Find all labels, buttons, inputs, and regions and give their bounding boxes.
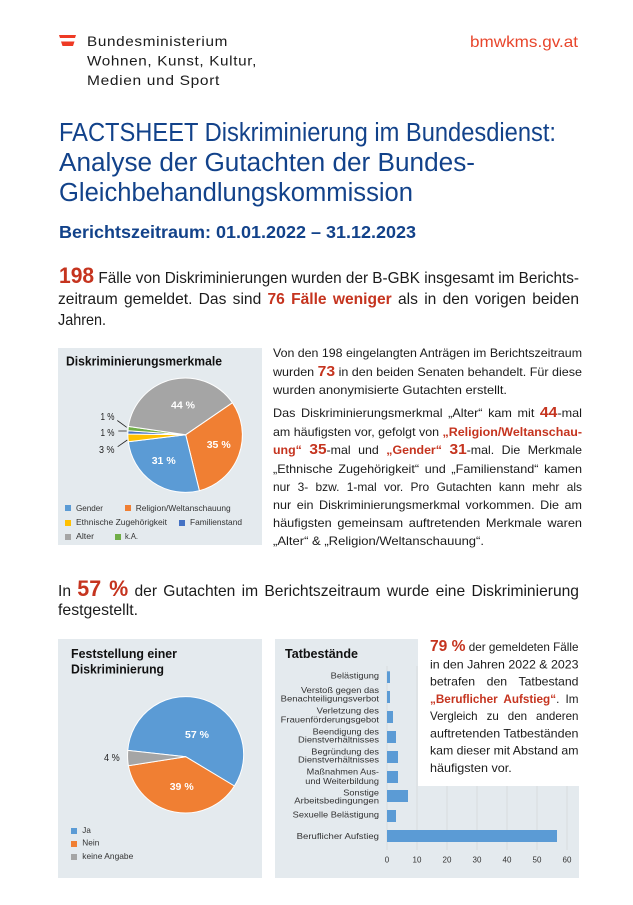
pie value labels: 4 % xyxy=(104,752,120,764)
ministry name xyxy=(87,33,257,88)
body text: senate cases and characteristics: wurden 73 in den beiden Senaten behandelt. Für diese xyxy=(272,363,582,380)
ministry name: Bundesministerium xyxy=(87,33,228,49)
panel heading: Feststellung einer xyxy=(71,647,177,661)
body text: senate cases and characteristics: ung“ 35-mal und „Gender“ 31-mal. Die Merkmale xyxy=(273,441,582,458)
x axis labels xyxy=(385,856,572,864)
bar labels: Frauenförderungsgebot xyxy=(281,715,380,725)
bar chart: Tatbestände xyxy=(387,671,557,842)
callout: 79 %: häufigsten vor. xyxy=(430,761,512,775)
bar labels: Sexuelle Belästigung xyxy=(293,810,379,820)
callout: 79 %: Vergleich zu den anderen xyxy=(430,709,578,723)
bar labels: und Weiterbildung xyxy=(305,776,379,786)
panel heading: Diskriminierungsmerkmale xyxy=(66,354,222,368)
legend: Ethnische Zugehörigkeit xyxy=(76,517,168,527)
callout: 79 %: „Beruflicher Aufstieg“. Im xyxy=(430,692,579,706)
intro text xyxy=(58,263,579,329)
x axis labels: 10 xyxy=(413,856,422,864)
pie value labels: 1 % xyxy=(100,411,114,423)
x axis labels: 50 xyxy=(533,856,542,864)
callout: 79 %: betrafen den Tatbestand xyxy=(430,674,578,688)
x axis labels: 30 xyxy=(473,856,482,864)
body text: senate cases and characteristics: „Alter“ & „Religion/Weltanschauung“. xyxy=(273,534,484,548)
finding statement: In 57 % der Gutachten im Berichtszeitraum wurde eine Diskriminierung xyxy=(58,576,579,601)
panel: Tatbestände xyxy=(275,639,580,878)
ministry name: Medien und Sport xyxy=(87,72,220,88)
panel: Diskriminierungsmerkmale xyxy=(58,348,262,545)
body text: senate cases and characteristics: Von den 198 eingelangten Anträgen im Berichtszeitraum xyxy=(273,346,582,360)
pie value labels xyxy=(99,400,231,467)
x axis labels: 0 xyxy=(385,856,390,864)
pie value labels: 35 % xyxy=(207,439,231,451)
intro text: Jahren. xyxy=(58,312,106,329)
panel heading: Tatbestände xyxy=(285,647,358,661)
reporting period heading: Berichtszeitraum: 01.01.2022 – 31.12.2023 xyxy=(59,222,416,242)
body text: senate cases and characteristics: wurden anonymisierte Gutachten erstellt. xyxy=(272,383,507,397)
bar labels: Maßnahmen Aus- xyxy=(307,767,379,777)
legend: Ja xyxy=(82,825,91,835)
icon: Austrian flag emblem xyxy=(59,35,76,46)
body text: senate cases and characteristics: am häufigsten vor, gefolgt von „Religion/Weltanschau- xyxy=(273,425,582,439)
callout: 79 %: auftretenden Tatbeständen xyxy=(430,726,578,740)
callout: 79 %: kam dieser mit Abstand am xyxy=(430,744,578,758)
pie chart: characteristics xyxy=(128,378,242,492)
bar labels: Dienstverhältnisses xyxy=(298,735,379,745)
bar labels: Verletzung des xyxy=(317,706,379,716)
legend xyxy=(71,825,134,861)
bar labels: Begründung des xyxy=(311,747,379,757)
legend: Alter xyxy=(76,531,94,541)
bar labels xyxy=(281,670,380,841)
body text: senate cases and characteristics: nur 3- bzw. 1-mal vor. Pro Gutachten kann mehr als xyxy=(273,480,582,494)
pie value labels: 3 % xyxy=(99,444,114,456)
pie value labels xyxy=(104,729,210,793)
pie value labels: 39 % xyxy=(170,781,194,793)
callout: 79 % xyxy=(430,638,579,775)
body text: senate cases and characteristics: Das Diskriminierungsmerkmal „Alter“ kam mit 44-mal xyxy=(273,404,582,421)
logo: ministry xyxy=(59,33,257,88)
bar labels: Sonstige xyxy=(343,788,379,798)
title: FACTSHEET Diskriminierung im Bundesdienst: xyxy=(59,119,556,147)
title xyxy=(59,119,556,207)
body text: senate cases and characteristics: nur ein Diskriminierungsmerkmal vorkommen. Die am xyxy=(273,498,582,512)
legend: k.A. xyxy=(125,531,138,541)
bar labels: Benachteiligungsverbot xyxy=(281,694,380,704)
bar labels: Beruflicher Aufstieg xyxy=(297,831,379,841)
legend: Gender xyxy=(76,503,103,513)
legend: Religion/Weltanschauung xyxy=(136,503,231,513)
legend: Familienstand xyxy=(190,517,242,527)
panel: Feststellung einer Diskriminierung xyxy=(58,639,262,878)
body text: senate cases and characteristics: „Ethnische Zugehörigkeit“ und „Familienstand“ kamen xyxy=(273,462,582,476)
pie value labels: 31 % xyxy=(152,455,176,467)
title: Gleichbehandlungskommission xyxy=(59,179,413,207)
bar labels: Arbeitsbedingungen xyxy=(294,796,379,806)
finding statement xyxy=(58,576,579,619)
callout: 79 %: in den Jahren 2022 & 2023 xyxy=(430,658,579,672)
bar labels: Verstoß gegen das xyxy=(301,685,379,695)
legend xyxy=(65,503,242,541)
intro text: zeitraum gemeldet. Das sind 76 Fälle weniger als in den vorigen beiden xyxy=(58,291,579,308)
x axis labels: 60 xyxy=(563,856,572,864)
x axis labels: 20 xyxy=(443,856,452,864)
ministry name: Wohnen, Kunst, Kultur, xyxy=(87,52,257,68)
callout: 79 %: 79 % der gemeldeten Fälle xyxy=(430,638,579,655)
panel heading: Diskriminierung xyxy=(71,662,164,676)
website link: bmwkms.gv.at xyxy=(470,34,579,51)
intro text: 198 Fälle von Diskriminierungen wurden der B-GBK insgesamt im Berichts- xyxy=(59,263,579,288)
bar chart gridlines xyxy=(387,666,567,850)
body text: senate cases and characteristics xyxy=(272,346,582,548)
pie value labels: 57 % xyxy=(185,729,210,741)
bar labels: Beendigung des xyxy=(313,727,379,737)
finding statement: festgestellt. xyxy=(58,602,138,619)
x axis labels: 40 xyxy=(503,856,512,864)
white cutout behind callout xyxy=(418,639,580,786)
panel heading xyxy=(71,647,177,676)
legend: Nein xyxy=(82,838,100,848)
pie chart: finding xyxy=(128,697,244,813)
title: Analyse der Gutachten der Bundes- xyxy=(59,149,475,177)
pie value labels: 1 % xyxy=(100,427,114,439)
body text: senate cases and characteristics: häufigsten gemeinsam auftretenden Merkmale waren xyxy=(273,516,582,530)
bar labels: Dienstverhältnisses xyxy=(298,755,379,765)
bar labels: Belästigung xyxy=(331,670,379,680)
legend: keine Angabe xyxy=(82,851,134,861)
pie value labels: 44 % xyxy=(171,400,196,412)
